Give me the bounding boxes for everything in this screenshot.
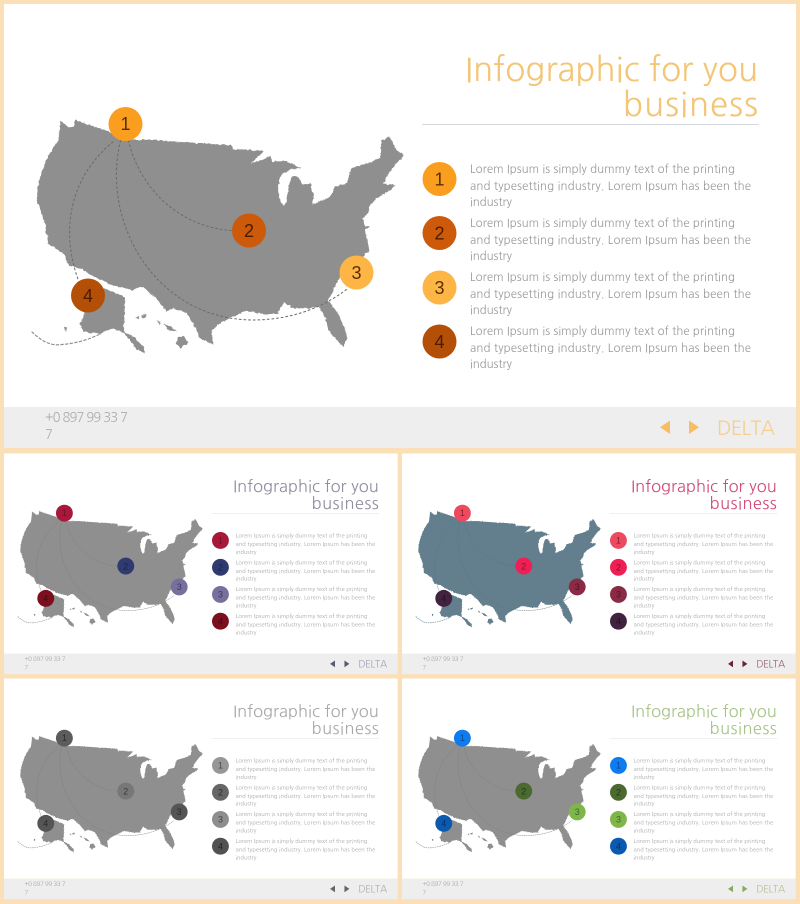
list of four items: industry — [634, 801, 655, 807]
brand label: DELTA — [358, 885, 388, 895]
list of four items: and typesetting industry. Lorem Ipsum has been the — [634, 568, 773, 574]
phone number — [24, 880, 66, 896]
panel: navy and crimson variant — [4, 454, 398, 674]
title: business — [312, 721, 379, 737]
navigation arrows — [660, 420, 699, 434]
title rule — [422, 124, 759, 125]
list of four items: industry — [236, 801, 257, 807]
map of the USA — [32, 120, 404, 353]
panel background — [4, 4, 796, 407]
list of four items: and typesetting industry. Lorem Ipsum has been the — [634, 621, 773, 627]
panel: grayscale variant — [4, 678, 398, 899]
list of four items: 3 — [218, 815, 223, 825]
list of four items: 1 — [616, 761, 621, 771]
list of four items: industry — [470, 196, 513, 208]
list of four items: 4 — [616, 841, 621, 851]
connector lines — [435, 746, 572, 836]
phone number: +0 897 99 33 7 — [24, 655, 66, 662]
list of four items: and typesetting industry. Lorem Ipsum has been the — [236, 621, 375, 627]
list of four items: Lorem Ipsum is simply dummy text of the printing — [470, 325, 735, 337]
phone number: +0 897 99 33 7 — [422, 655, 464, 662]
list of four items: 1 — [218, 536, 223, 546]
map of the USA — [18, 511, 203, 627]
map markers: 3 — [575, 807, 580, 817]
map markers: 4 — [441, 594, 446, 604]
map markers: 1 — [62, 508, 67, 518]
list of four items — [212, 757, 375, 860]
map of the USA — [416, 511, 601, 627]
title: business — [623, 88, 758, 121]
list of four items: Lorem Ipsum is simply dummy text of the printing — [470, 217, 735, 229]
list of four items: 2 — [434, 224, 445, 244]
list of four items: 4 — [434, 332, 445, 352]
map markers — [37, 730, 188, 832]
phone number: +0 897 99 33 7 — [45, 411, 128, 424]
list of four items: Lorem Ipsum is simply dummy text of the printing — [470, 163, 735, 175]
list of four items: and typesetting industry. Lorem Ipsum has been the — [634, 846, 773, 852]
title — [233, 704, 379, 737]
brand label: DELTA — [756, 660, 786, 670]
title — [233, 479, 379, 512]
list of four items: and typesetting industry. Lorem Ipsum has been the — [236, 846, 375, 852]
title: Infographic for you — [233, 479, 379, 495]
list of four items: and typesetting industry. Lorem Ipsum has been the — [236, 766, 375, 772]
list of four items: 4 — [218, 841, 223, 851]
phone number — [45, 411, 128, 441]
phone number: 7 — [422, 889, 426, 896]
phone number: +0 897 99 33 7 — [24, 880, 66, 887]
connector lines — [435, 521, 572, 611]
map markers: 3 — [351, 263, 362, 283]
list of four items — [610, 532, 773, 635]
footer bar — [4, 407, 796, 448]
list of four items: and typesetting industry. Lorem Ipsum has been the — [236, 541, 375, 547]
phone number: 7 — [24, 889, 28, 896]
list of four items: and typesetting industry. Lorem Ipsum has been the — [634, 766, 773, 772]
list of four items: industry — [236, 549, 257, 555]
list of four items: industry — [634, 828, 655, 834]
brand label: DELTA — [358, 660, 388, 670]
map markers: 3 — [575, 582, 580, 592]
title — [631, 704, 777, 737]
phone number — [422, 655, 464, 671]
phone number: 7 — [24, 664, 28, 671]
list of four items: Lorem Ipsum is simply dummy text of the printing — [470, 271, 735, 283]
list of four items: Lorem Ipsum is simply dummy text of the printing — [236, 757, 367, 763]
list of four items: industry — [236, 854, 257, 860]
list of four items: and typesetting industry. Lorem Ipsum has been the — [236, 820, 375, 826]
list of four items: 1 — [218, 761, 223, 771]
map markers: 4 — [43, 819, 48, 829]
list of four items: and typesetting industry. Lorem Ipsum has been the — [470, 342, 751, 354]
list of four items: industry — [236, 576, 257, 582]
title: business — [710, 721, 777, 737]
list of four items: industry — [634, 576, 655, 582]
list of four items: industry — [236, 603, 257, 609]
navigation arrows — [728, 661, 747, 667]
title: Infographic for you — [631, 704, 777, 720]
map markers: 2 — [244, 221, 254, 241]
list of four items: and typesetting industry. Lorem Ipsum has been the — [236, 568, 375, 574]
brand label: DELTA — [756, 885, 786, 895]
list of four items: industry — [634, 629, 655, 635]
list of four items: Lorem Ipsum is simply dummy text of the printing — [634, 532, 765, 538]
list of four items: industry — [634, 603, 655, 609]
list of four items: and typesetting industry. Lorem Ipsum has been the — [470, 288, 751, 300]
list of four items: 3 — [434, 278, 445, 298]
title: Infographic for you — [233, 704, 379, 720]
list of four items: industry — [634, 549, 655, 555]
map markers: 2 — [521, 561, 526, 571]
list of four items: 3 — [218, 590, 223, 600]
list of four items: Lorem Ipsum is simply dummy text of the printing — [236, 559, 367, 565]
list of four items: Lorem Ipsum is simply dummy text of the printing — [634, 811, 765, 817]
list of four items: industry — [236, 774, 257, 780]
map markers — [71, 107, 374, 312]
list of four items: Lorem Ipsum is simply dummy text of the printing — [236, 532, 367, 538]
list of four items: industry — [470, 304, 513, 316]
phone number — [24, 655, 66, 671]
panel background — [4, 678, 398, 879]
map markers: 2 — [521, 786, 526, 796]
list of four items: industry — [236, 629, 257, 635]
phone number: 7 — [45, 428, 53, 441]
title — [465, 53, 758, 121]
list of four items: 3 — [616, 590, 621, 600]
map markers: 4 — [43, 594, 48, 604]
list of four items: industry — [470, 358, 513, 370]
list of four items: Lorem Ipsum is simply dummy text of the printing — [236, 613, 367, 619]
title: business — [312, 496, 379, 512]
list of four items: 1 — [434, 170, 445, 190]
panel background — [402, 454, 796, 654]
list of four items: Lorem Ipsum is simply dummy text of the printing — [236, 838, 367, 844]
list of four items: Lorem Ipsum is simply dummy text of the printing — [634, 838, 765, 844]
list of four items: and typesetting industry. Lorem Ipsum has been the — [634, 595, 773, 601]
map markers: 1 — [120, 114, 131, 134]
list of four items — [212, 532, 375, 635]
panel: main orange — [4, 4, 796, 448]
list of four items: Lorem Ipsum is simply dummy text of the printing — [634, 757, 765, 763]
phone number — [422, 880, 464, 896]
title rule — [610, 512, 777, 515]
map markers: 3 — [177, 807, 182, 817]
list of four items: industry — [236, 828, 257, 834]
map markers: 1 — [460, 508, 465, 518]
map markers — [435, 505, 586, 607]
map markers: 4 — [83, 286, 93, 306]
list of four items: 4 — [616, 616, 621, 626]
list of four items: 2 — [218, 563, 223, 573]
title — [631, 479, 777, 512]
phone number: 7 — [422, 664, 426, 671]
panel background — [4, 454, 398, 654]
list of four items — [422, 162, 751, 370]
footer bar — [402, 654, 796, 674]
list of four items: 4 — [218, 616, 223, 626]
list of four items: Lorem Ipsum is simply dummy text of the printing — [236, 586, 367, 592]
list of four items: and typesetting industry. Lorem Ipsum has been the — [634, 793, 773, 799]
list of four items: Lorem Ipsum is simply dummy text of the printing — [634, 613, 765, 619]
title: Infographic for you — [465, 53, 758, 86]
brand label: DELTA — [717, 418, 775, 438]
navigation arrows — [330, 661, 349, 667]
title rule — [610, 737, 777, 740]
list of four items: and typesetting industry. Lorem Ipsum has been the — [634, 820, 773, 826]
list of four items: and typesetting industry. Lorem Ipsum has been the — [236, 595, 375, 601]
list of four items: Lorem Ipsum is simply dummy text of the printing — [236, 811, 367, 817]
map markers — [435, 730, 586, 832]
list of four items: 3 — [616, 815, 621, 825]
map markers: 2 — [123, 786, 128, 796]
list of four items: and typesetting industry. Lorem Ipsum has been the — [236, 793, 375, 799]
list of four items: 2 — [616, 788, 621, 798]
panel: red and slate variant — [402, 454, 796, 674]
map markers: 2 — [123, 561, 128, 571]
map markers: 1 — [62, 733, 67, 743]
list of four items: and typesetting industry. Lorem Ipsum has been the — [470, 180, 751, 192]
list of four items: and typesetting industry. Lorem Ipsum has been the — [634, 541, 773, 547]
list of four items: and typesetting industry. Lorem Ipsum has been the — [470, 234, 751, 246]
phone number: +0 897 99 33 7 — [422, 880, 464, 887]
navigation arrows — [728, 886, 747, 892]
map markers — [37, 505, 188, 607]
list of four items — [610, 757, 773, 860]
map markers: 4 — [441, 819, 446, 829]
list of four items: 2 — [218, 788, 223, 798]
title rule — [212, 512, 379, 515]
connector lines — [37, 746, 174, 836]
map markers: 3 — [177, 582, 182, 592]
map markers: 1 — [460, 733, 465, 743]
map of the USA — [18, 736, 203, 852]
list of four items: Lorem Ipsum is simply dummy text of the printing — [634, 784, 765, 790]
dashed connector lines — [70, 140, 347, 320]
list of four items: industry — [634, 774, 655, 780]
footer bar — [4, 879, 398, 899]
list of four items: 1 — [616, 536, 621, 546]
navigation arrows — [330, 886, 349, 892]
footer bar — [402, 879, 796, 899]
map of the USA — [416, 736, 601, 852]
footer bar — [4, 654, 398, 674]
panel: blue and green variant — [402, 678, 796, 899]
connector lines — [37, 521, 174, 611]
list of four items: Lorem Ipsum is simply dummy text of the printing — [634, 586, 765, 592]
title: Infographic for you — [631, 479, 777, 495]
list of four items: 2 — [616, 563, 621, 573]
panel background — [402, 678, 796, 879]
title rule — [212, 737, 379, 740]
list of four items: industry — [470, 250, 513, 262]
list of four items: industry — [634, 854, 655, 860]
title: business — [710, 496, 777, 512]
list of four items: Lorem Ipsum is simply dummy text of the printing — [236, 784, 367, 790]
list of four items: Lorem Ipsum is simply dummy text of the printing — [634, 559, 765, 565]
